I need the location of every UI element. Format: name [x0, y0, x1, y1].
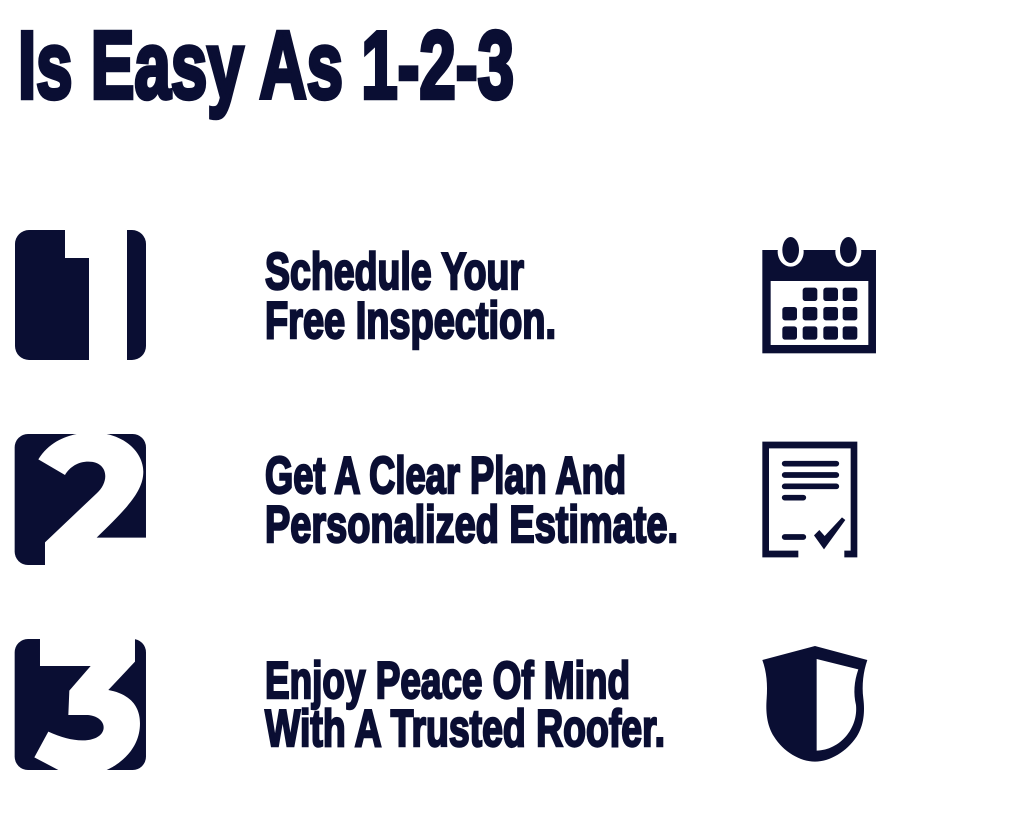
step 2 text: Get A Clear Plan And	[265, 447, 626, 505]
icon: number 2 badge	[15, 431, 147, 567]
step 3 text: Enjoy Peace Of Mind	[265, 652, 630, 710]
title: Is Easy As 1-2-3	[18, 12, 514, 119]
step 3 text: With A Trusted Roofer.	[265, 700, 665, 758]
step 3 text	[265, 652, 665, 758]
icon: number 3 badge	[15, 637, 146, 770]
step 2 text	[265, 447, 678, 554]
step 2 row	[15, 431, 854, 567]
icon: number 1 badge	[15, 230, 146, 360]
icon: shield	[762, 646, 867, 762]
icon: calendar	[762, 237, 876, 353]
step 2 text: Personalized Estimate.	[265, 496, 678, 554]
step 1 row	[15, 230, 876, 360]
step 1 text: Free Inspection.	[265, 292, 556, 350]
icon: document with check	[766, 445, 854, 554]
step 1 text: Schedule Your	[265, 243, 524, 301]
step 1 text	[265, 243, 556, 350]
step 3 row	[15, 637, 867, 770]
